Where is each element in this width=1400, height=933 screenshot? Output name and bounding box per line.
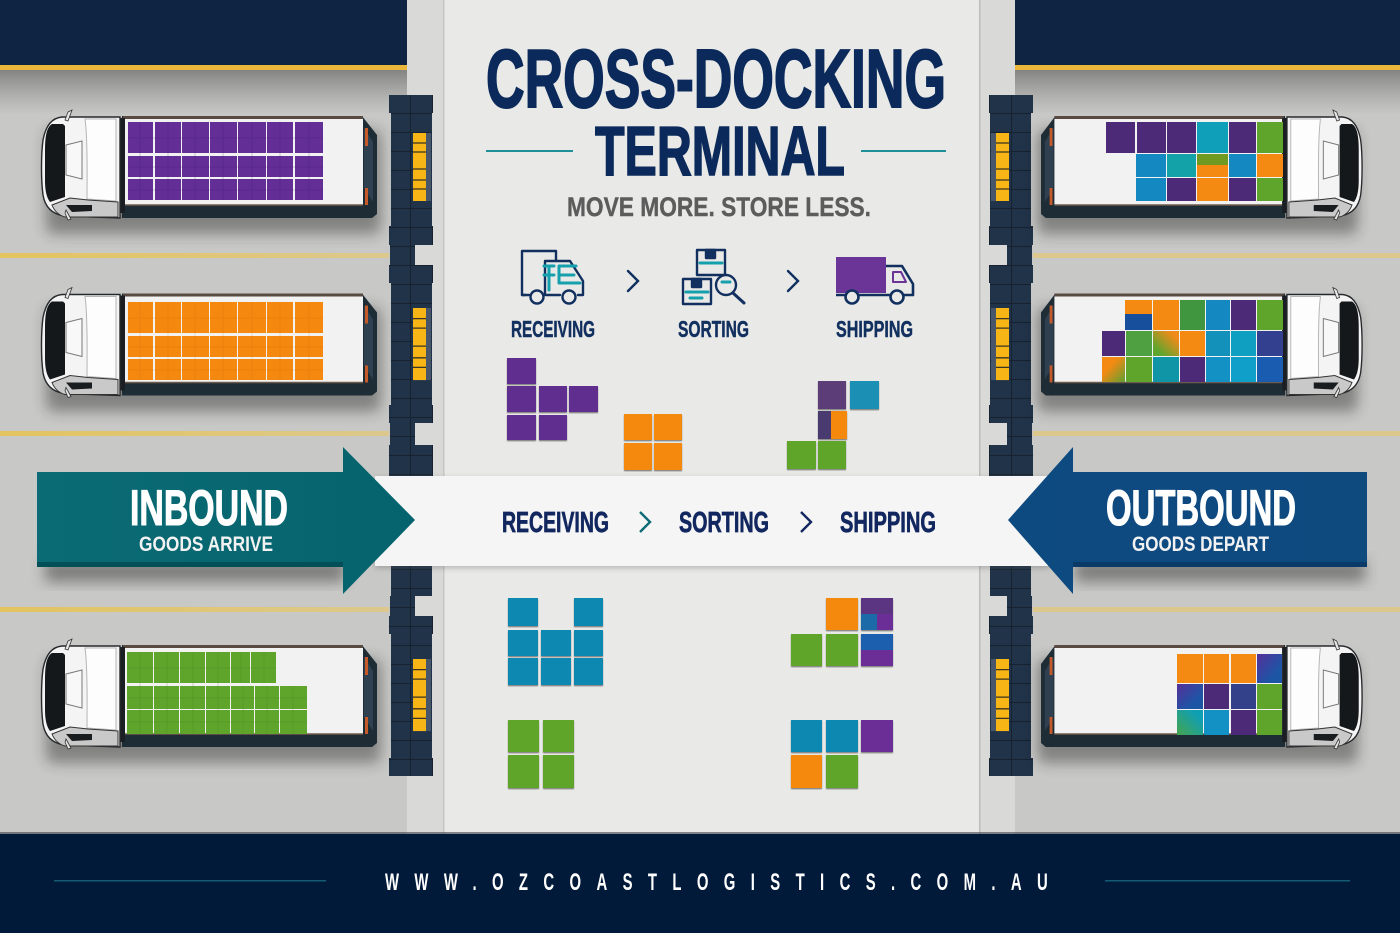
outbound truck 2: mixed cargo xyxy=(1037,288,1362,412)
tiles: mixed stack lower one xyxy=(791,598,893,666)
tiles: blue stack xyxy=(508,598,603,685)
banner arrow one xyxy=(640,512,650,532)
outbound heading: OUTBOUND xyxy=(1106,480,1296,536)
top right navy band xyxy=(1015,0,1400,70)
mixed cargo tiles xyxy=(1102,300,1283,382)
left dock doors xyxy=(389,95,433,776)
outbound truck 3: mixed cargo xyxy=(1037,639,1362,763)
arrow: outbound xyxy=(1008,447,1367,594)
inbound truck: green cargo xyxy=(42,639,381,763)
top left navy band xyxy=(0,0,407,70)
banner label: shipping: SHIPPING xyxy=(840,507,936,539)
inbound subtitle: GOODS ARRIVE xyxy=(139,533,273,556)
outbound truck 1: mixed cargo xyxy=(1037,110,1362,234)
outbound subtitle: GOODS DEPART xyxy=(1132,533,1269,556)
right dock doors xyxy=(989,95,1033,776)
title rule right xyxy=(861,150,946,152)
title rule left xyxy=(486,150,573,152)
orange cargo tiles xyxy=(128,302,323,380)
inbound heading: INBOUND xyxy=(130,480,288,536)
process banner xyxy=(375,476,1050,568)
purple cargo tiles xyxy=(128,122,323,200)
title: terminal: TERMINAL xyxy=(595,112,845,190)
arrow: receiving to sorting xyxy=(628,271,638,291)
icon: sorting boxes with magnifier xyxy=(683,250,744,304)
tiles: mixed stack lower two xyxy=(791,720,893,788)
banner arrow two xyxy=(801,512,811,532)
label: receiving: RECEIVING xyxy=(511,316,595,342)
tiles: mixed stack upper xyxy=(787,381,879,469)
tiles: purple stack xyxy=(507,358,598,440)
icon: shipping truck xyxy=(836,257,913,304)
title: cross-docking: CROSS-DOCKING xyxy=(486,32,946,125)
tagline: MOVE MORE. STORE LESS. xyxy=(567,192,871,222)
mixed cargo tiles xyxy=(1177,654,1282,735)
label: shipping: SHIPPING xyxy=(836,316,913,342)
banner label: sorting: SORTING xyxy=(679,507,769,539)
mixed cargo tiles xyxy=(1106,122,1283,201)
green cargo tiles xyxy=(127,652,307,734)
tiles: green stack xyxy=(508,720,574,788)
label: sorting: SORTING xyxy=(678,316,749,342)
icon: receiving truck xyxy=(522,251,583,304)
inbound truck: purple cargo xyxy=(42,110,381,234)
arrow: sorting to shipping xyxy=(788,271,798,291)
footer xyxy=(0,832,1400,933)
arrow: inbound xyxy=(37,447,415,594)
tiles: orange stack xyxy=(624,414,682,470)
lane lines xyxy=(0,253,1400,612)
banner label: receiving: RECEIVING xyxy=(502,507,609,539)
inbound truck: orange cargo xyxy=(42,288,381,412)
footer url: WWW.OZCOASTLOGISTICS.COM.AU xyxy=(385,870,1048,896)
